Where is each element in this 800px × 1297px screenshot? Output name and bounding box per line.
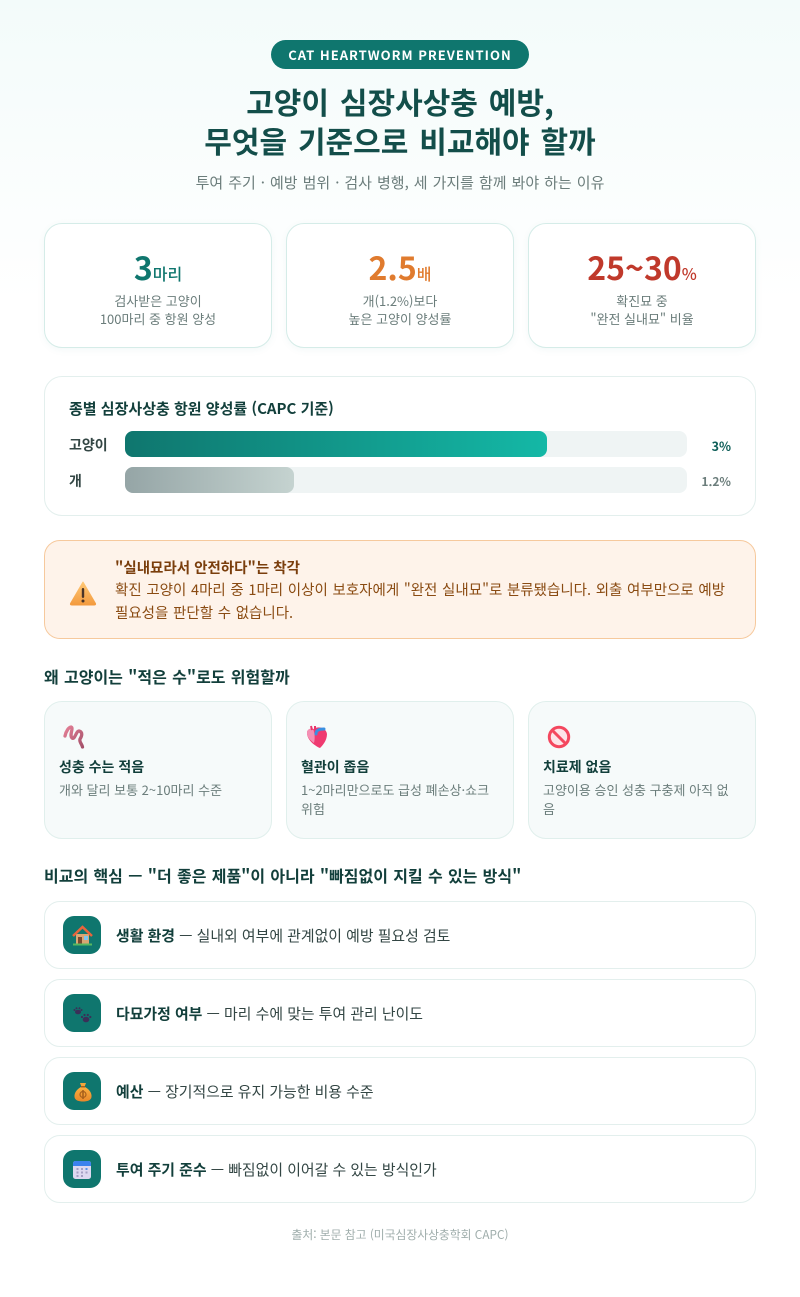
callout text	[115, 556, 725, 622]
card: no treatment	[528, 701, 756, 839]
category pill: CAT HEARTWORM PREVENTION	[288, 45, 512, 64]
stat label: 100마리 중 항원 양성	[100, 309, 216, 328]
callout: indoor misconception	[44, 540, 756, 639]
card title: 혈관이 좁음	[301, 757, 369, 777]
stat label: 높은 고양이 양성률	[349, 309, 451, 328]
icon: heart	[307, 726, 327, 748]
row: dosing schedule	[44, 1135, 756, 1203]
stat label: 확진묘 중	[616, 291, 668, 310]
heading: comparison core: 비교의 핵심 — "더 좋은 제품"이 아니라 "빠짐없이 지킬 수 있는 방식"	[44, 863, 521, 887]
icon: prohibited	[548, 726, 570, 748]
bar value: cat: 3%	[712, 436, 731, 455]
heading: why cats: 왜 고양이는 "적은 수"로도 위험할까	[44, 664, 290, 688]
card title: 성충 수는 적음	[59, 757, 144, 777]
subtitle: 투여 주기 · 예방 범위 · 검사 병행, 세 가지를 함께 봐야 하는 이유	[196, 172, 604, 193]
row: multi-cat household	[44, 979, 756, 1047]
callout text: 필요성을 판단할 수 없습니다.	[115, 602, 293, 622]
stat label	[349, 291, 451, 328]
bar label: dog: 개	[69, 471, 82, 491]
card text: 위험	[301, 799, 325, 818]
row text: 예산 — 장기적으로 유지 가능한 비용 수준	[116, 1081, 374, 1102]
bar: cat 3%	[125, 431, 687, 457]
source footer: 출처: 본문 참고 (미국심장사상충학회 CAPC)	[292, 1226, 508, 1243]
stat value: 25~30%	[587, 244, 697, 290]
card text: 음	[543, 799, 555, 818]
card title: 치료제 없음	[543, 757, 611, 777]
category pill	[271, 40, 529, 69]
bar: dog 1.2%	[125, 467, 687, 493]
row: budget	[44, 1057, 756, 1125]
bar fill: dog	[125, 467, 294, 493]
row text: 다묘가정 여부 — 마리 수에 맞는 투여 관리 난이도	[116, 1003, 423, 1024]
card text: 개와 달리 보통 2~10마리 수준	[59, 780, 222, 799]
icon: calendar	[63, 1150, 101, 1188]
stat label	[590, 291, 694, 328]
row: living environment	[44, 901, 756, 969]
title: 고양이 심장사상충 예방,	[246, 79, 554, 123]
stat card: 3 per 100 cats	[44, 223, 272, 348]
stat card: 2.5 times	[286, 223, 514, 348]
stat label	[100, 291, 216, 328]
stat label: 개(1.2%)보다	[363, 291, 437, 310]
icon: warning	[70, 582, 96, 606]
chart heading: 종별 심장사상충 항원 양성률 (CAPC 기준)	[69, 398, 334, 419]
stat label: 검사받은 고양이	[114, 291, 202, 310]
card: narrow vessels	[286, 701, 514, 839]
icon: paw prints	[63, 994, 101, 1032]
row text: 생활 환경 — 실내외 여부에 관계없이 예방 필요성 검토	[116, 925, 450, 946]
title	[204, 79, 596, 162]
panel: bar chart	[44, 376, 756, 516]
bar label: cat: 고양이	[69, 435, 108, 455]
bar value: dog: 1.2%	[701, 473, 731, 490]
stat label: "완전 실내묘" 비율	[590, 309, 694, 328]
card text	[301, 780, 489, 818]
bar fill: cat	[125, 431, 547, 457]
icon: house	[63, 916, 101, 954]
card text: 1~2마리만으로도 급성 폐손상·쇼크	[301, 780, 489, 799]
stat value: 3마리	[134, 244, 182, 290]
card text: 고양이용 승인 성충 구충제 아직 없	[543, 780, 729, 799]
row text: 투여 주기 준수 — 빠짐없이 이어갈 수 있는 방식인가	[116, 1159, 437, 1180]
card text	[543, 780, 729, 818]
icon: money bag	[63, 1072, 101, 1110]
stat card: 25 to 30 percent	[528, 223, 756, 348]
icon: worm	[63, 725, 84, 749]
title: 무엇을 기준으로 비교해야 할까	[204, 118, 596, 162]
stat value: 2.5배	[369, 244, 431, 290]
card: few adult worms	[44, 701, 272, 839]
callout text: "실내묘라서 안전하다"는 착각	[115, 556, 300, 578]
callout text: 확진 고양이 4마리 중 1마리 이상이 보호자에게 "완전 실내묘"로 분류됐습니다. 외출 여부만으로 예방	[115, 579, 725, 600]
